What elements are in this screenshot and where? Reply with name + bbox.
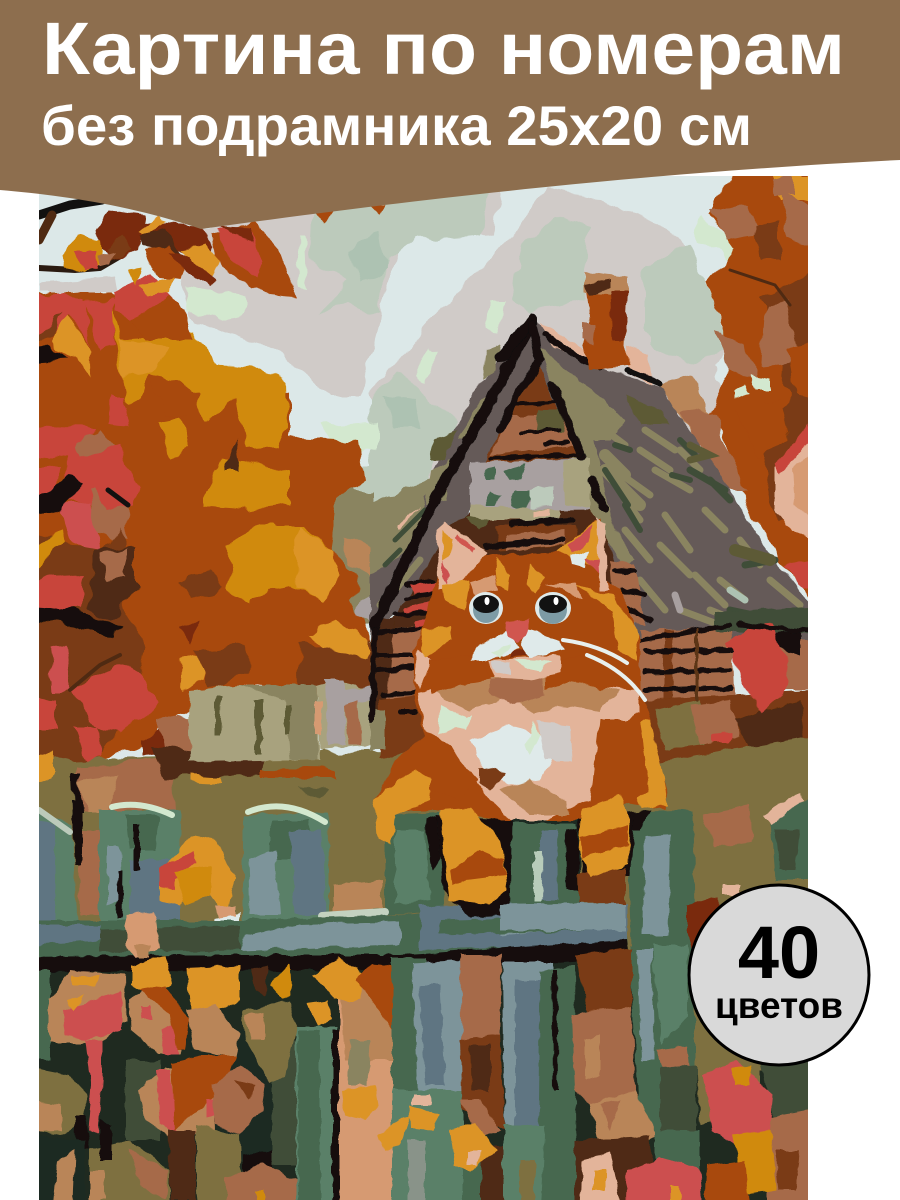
cat plank between paws — [500, 825, 625, 930]
painting: autumn cat on a fence — [30, 170, 820, 1200]
sky and clouds — [180, 170, 735, 640]
subtitle: без подрамника 25x20 см — [41, 94, 752, 157]
orange cat — [373, 518, 667, 930]
background pale fence and ground — [30, 740, 820, 960]
lower section base — [39, 960, 808, 1200]
badge: 40 colours — [689, 885, 869, 1065]
red bush at the house — [712, 625, 785, 742]
cat muzzle — [470, 620, 565, 680]
cat markings — [420, 558, 637, 660]
badge: 40 colours: цветов — [715, 985, 843, 1026]
badge: 40 colours: 40 — [738, 911, 820, 994]
roof — [370, 318, 815, 640]
cat ears — [436, 518, 610, 590]
lower fence planks — [30, 945, 815, 1200]
dark branches — [39, 200, 790, 690]
foliage behind the roof — [660, 375, 745, 490]
cat eyes — [469, 592, 571, 624]
cat shadow — [437, 815, 635, 917]
red stripes under the left ear — [404, 582, 436, 628]
fence planks upper — [39, 793, 808, 947]
left autumn tree — [30, 290, 372, 790]
cat body — [373, 518, 667, 905]
pale distant trees — [189, 680, 375, 762]
right tree pink accent — [735, 375, 812, 590]
title: Картина по номерам — [42, 7, 845, 90]
top banner — [0, 0, 900, 229]
foreground autumn leaves — [30, 840, 815, 1200]
gable and logs — [370, 366, 808, 764]
roof and log black lines — [372, 320, 815, 720]
fence rail — [30, 903, 630, 972]
chimney ridge cap — [627, 370, 660, 384]
top-left leaves — [39, 205, 385, 340]
cat whiskers — [563, 640, 645, 700]
thatched house — [368, 272, 808, 764]
right autumn tree — [706, 176, 808, 598]
chimney — [583, 272, 630, 370]
fence cap highlights — [39, 805, 385, 916]
roof straw strokes — [376, 426, 804, 626]
